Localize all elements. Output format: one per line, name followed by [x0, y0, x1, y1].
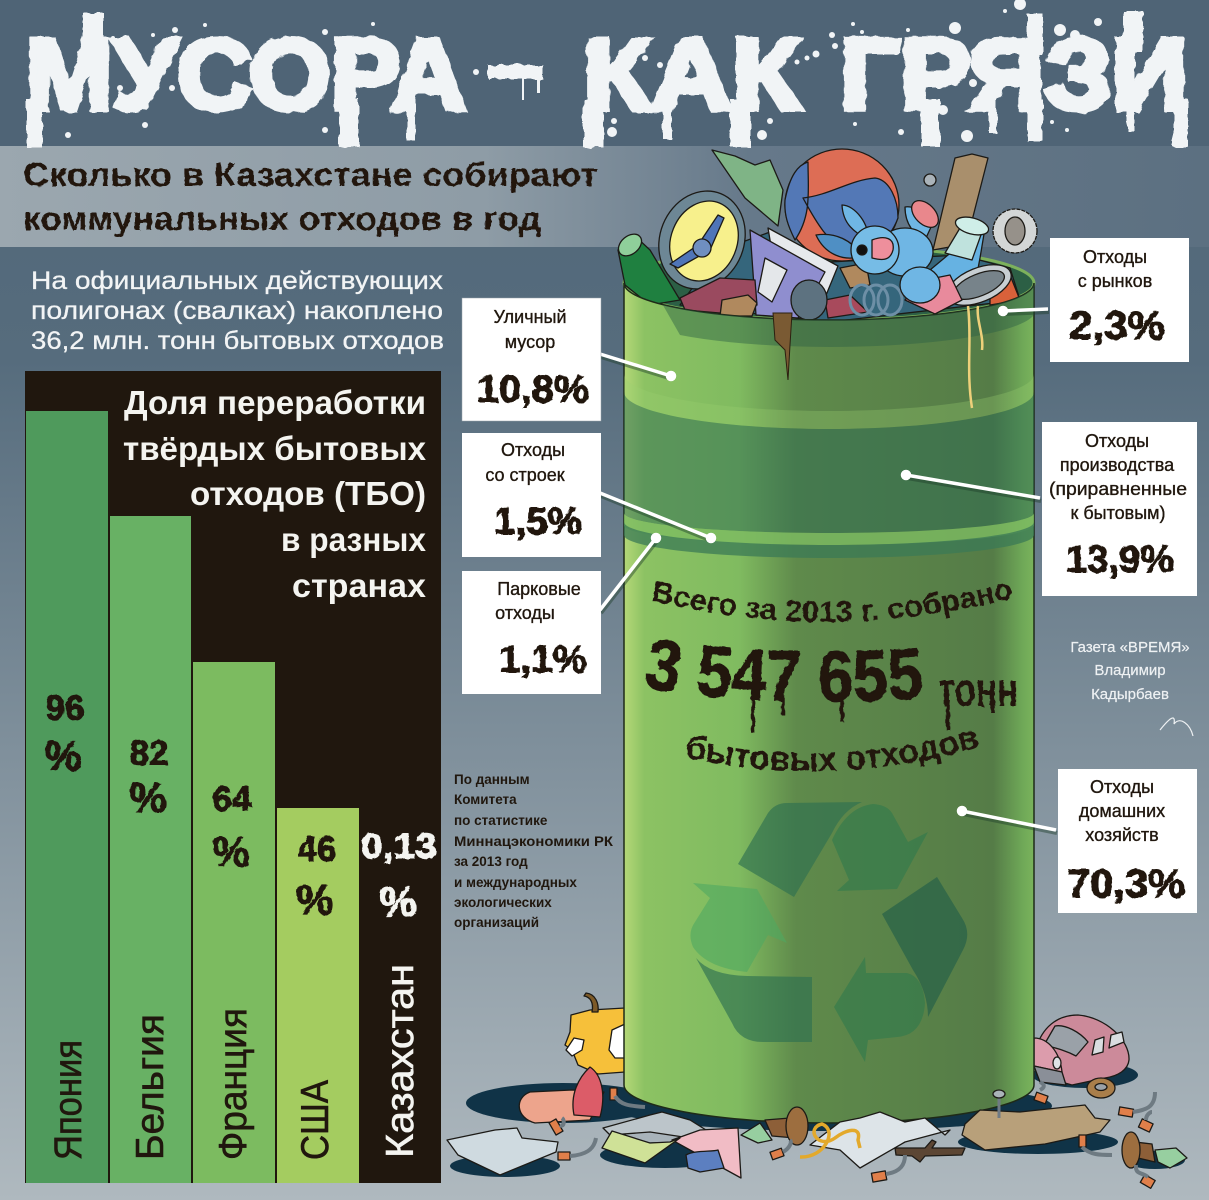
pink cloth [825, 295, 868, 318]
callout: market waste [1050, 238, 1189, 362]
can body [624, 283, 1034, 1123]
callout: industrial waste: 13,9% [1066, 539, 1174, 581]
callout: industrial waste: Отходы [1085, 431, 1149, 451]
bar values: % [379, 878, 417, 925]
icon: wood board [962, 1105, 1110, 1150]
callout: market waste: 2,3% [1069, 304, 1165, 348]
callout: street litter: Уличный [493, 307, 567, 327]
lighter strip [624, 374, 1034, 429]
bar values [44, 689, 437, 925]
callout: industrial waste [1042, 422, 1197, 596]
subtitle: коммунальных отходов в год [23, 200, 541, 237]
apple core [905, 275, 962, 314]
bar values: % [129, 774, 167, 821]
gear [993, 209, 1037, 253]
rusty plate [941, 257, 1017, 313]
bar labels: США [294, 1080, 337, 1160]
chart heading: Доля переработки [124, 384, 426, 421]
icon: apple core [565, 993, 625, 1074]
callout: park waste: Парковые [497, 579, 581, 599]
white papers [768, 228, 838, 305]
source note: Комитета [454, 792, 517, 807]
recycling logo [690, 802, 967, 1062]
callout: household waste: Отходы [1090, 777, 1154, 797]
landfill text block: полигонах (свалках) накоплено [31, 297, 443, 325]
bar values: 82 [130, 734, 168, 773]
bar: США [277, 808, 359, 1183]
rabbit toy [816, 196, 943, 303]
source note: организаций [454, 915, 539, 930]
title: МУСОРА [26, 19, 466, 131]
icon: crumpled grey paper [603, 1112, 722, 1140]
chart heading: твёрдых бытовых [123, 430, 427, 467]
callout: industrial waste: к бытовым) [1070, 503, 1166, 523]
source note: экологических [454, 895, 552, 910]
subtitle [23, 156, 598, 237]
callout: construction waste [462, 433, 601, 557]
icon: pink towel [519, 1067, 604, 1123]
cyan bottle [925, 222, 985, 300]
icon: crumpled paper left [447, 1128, 558, 1175]
source note: по статистике [454, 813, 548, 828]
callout: construction waste: 1,5% [494, 501, 582, 543]
orange piece [990, 275, 1020, 305]
credit: Владимир [1094, 662, 1166, 679]
illustration: trash heap in can [614, 149, 1037, 322]
bar values: 96 [46, 689, 84, 728]
bar labels [47, 964, 422, 1160]
drips on can rim [773, 313, 792, 380]
bar values: % [296, 876, 334, 923]
can opening [624, 246, 1034, 320]
green bottle [618, 236, 680, 305]
can inscription: тонн [938, 664, 1018, 717]
icon: blue scrap [686, 1150, 724, 1172]
source note: и международных [454, 875, 577, 890]
subtitle: Сколько в Казахстане собирают [23, 156, 598, 193]
green shard [712, 150, 783, 226]
bar: Франция [193, 662, 275, 1183]
landfill text block: 36,2 млн. тонн бытовых отходов [31, 327, 444, 355]
bar: Бельгия [110, 516, 191, 1183]
rib [624, 513, 1034, 545]
callout: construction waste: со строек [485, 465, 565, 485]
bar labels: Франция [212, 1008, 255, 1160]
can inscription [645, 581, 1018, 772]
callout: household waste [1058, 769, 1197, 913]
callout: household waste: хозяйств [1085, 825, 1159, 845]
bar values: % [212, 828, 250, 875]
callout: street litter: 10,8% [477, 369, 589, 411]
source note: Миннацэкономики РК [454, 834, 614, 849]
landfill text block: На официальных действующих [31, 267, 444, 295]
wood plank [933, 154, 988, 250]
bar labels: Казахстан [379, 964, 422, 1158]
can [623, 283, 1035, 1124]
icon: white paper right [810, 1112, 950, 1168]
title splatter [65, 0, 1102, 142]
ground shadows [450, 1062, 1185, 1177]
callout: park waste: 1,1% [499, 639, 587, 681]
callout: household waste: домашних [1079, 801, 1165, 821]
can inscription: бытовых отходов [686, 730, 979, 772]
bar: Япония [26, 411, 108, 1183]
illustration: fallen trash behind can [565, 993, 1129, 1098]
icon: mushroom scrap [741, 1107, 808, 1145]
callout: park waste: отходы [495, 603, 555, 623]
bar values: 0,13 [361, 827, 437, 866]
bar values: 64 [213, 780, 252, 819]
bar values: 46 [298, 830, 336, 869]
can inscription: Всего за 2013 г. собрано [652, 581, 1012, 623]
can inscription: 3 547 655 [645, 639, 922, 703]
upper band [624, 392, 1034, 533]
title: КАК [583, 19, 801, 131]
subtitle band [0, 146, 1209, 247]
callout: park waste [462, 571, 601, 694]
callout: street litter [462, 298, 601, 421]
chart heading: в разных [281, 521, 427, 558]
teal shadow mass [680, 232, 1020, 322]
bar labels: Япония [47, 1040, 90, 1160]
title: ГРЯЗИ [840, 19, 1188, 131]
icon: cigarette butts [549, 1088, 1155, 1188]
icon: noodle [800, 1124, 860, 1157]
credit: Кадырбаев [1091, 686, 1169, 703]
panel: recycling bar chart [25, 371, 441, 1183]
source note [454, 772, 614, 930]
bar values: % [44, 732, 82, 779]
ball [785, 149, 899, 261]
callout: street litter: мусор [505, 332, 555, 352]
purple book [750, 230, 825, 318]
icon: green leaflet [602, 1131, 680, 1163]
callout: market waste: Отходы [1083, 247, 1147, 267]
spring [850, 285, 902, 315]
credit [1070, 639, 1193, 736]
source note: По данным [454, 772, 530, 787]
chart heading: отходов (ТБО) [190, 475, 426, 512]
icon: branch [895, 1140, 965, 1162]
icon: mushroom scrap right [1122, 1132, 1187, 1168]
leader lines [601, 312, 1057, 833]
title [26, 0, 1188, 146]
tan box [840, 263, 870, 288]
foreground trash [447, 1067, 1187, 1188]
callout: market waste: с рынков [1078, 271, 1152, 291]
callout: industrial waste: (приравненные [1049, 479, 1187, 499]
chart background [25, 371, 441, 1183]
leader lines white [600, 308, 1056, 830]
callout: industrial waste: производства [1060, 455, 1175, 475]
callout: construction waste: Отходы [501, 440, 565, 460]
landfill text block [31, 267, 444, 355]
rim shadow [660, 283, 1036, 347]
clock [644, 178, 760, 302]
source note: за 2013 год [454, 854, 528, 869]
bar labels: Бельгия [129, 1014, 172, 1160]
chart heading [123, 384, 427, 604]
credit: Газета «ВРЕМЯ» [1070, 639, 1190, 656]
icon: pink paper [672, 1128, 741, 1178]
icon: pink toy car [1034, 1015, 1129, 1098]
chart heading: странах [292, 567, 427, 604]
title drips [27, 12, 1187, 146]
callout: household waste: 70,3% [1067, 862, 1185, 906]
